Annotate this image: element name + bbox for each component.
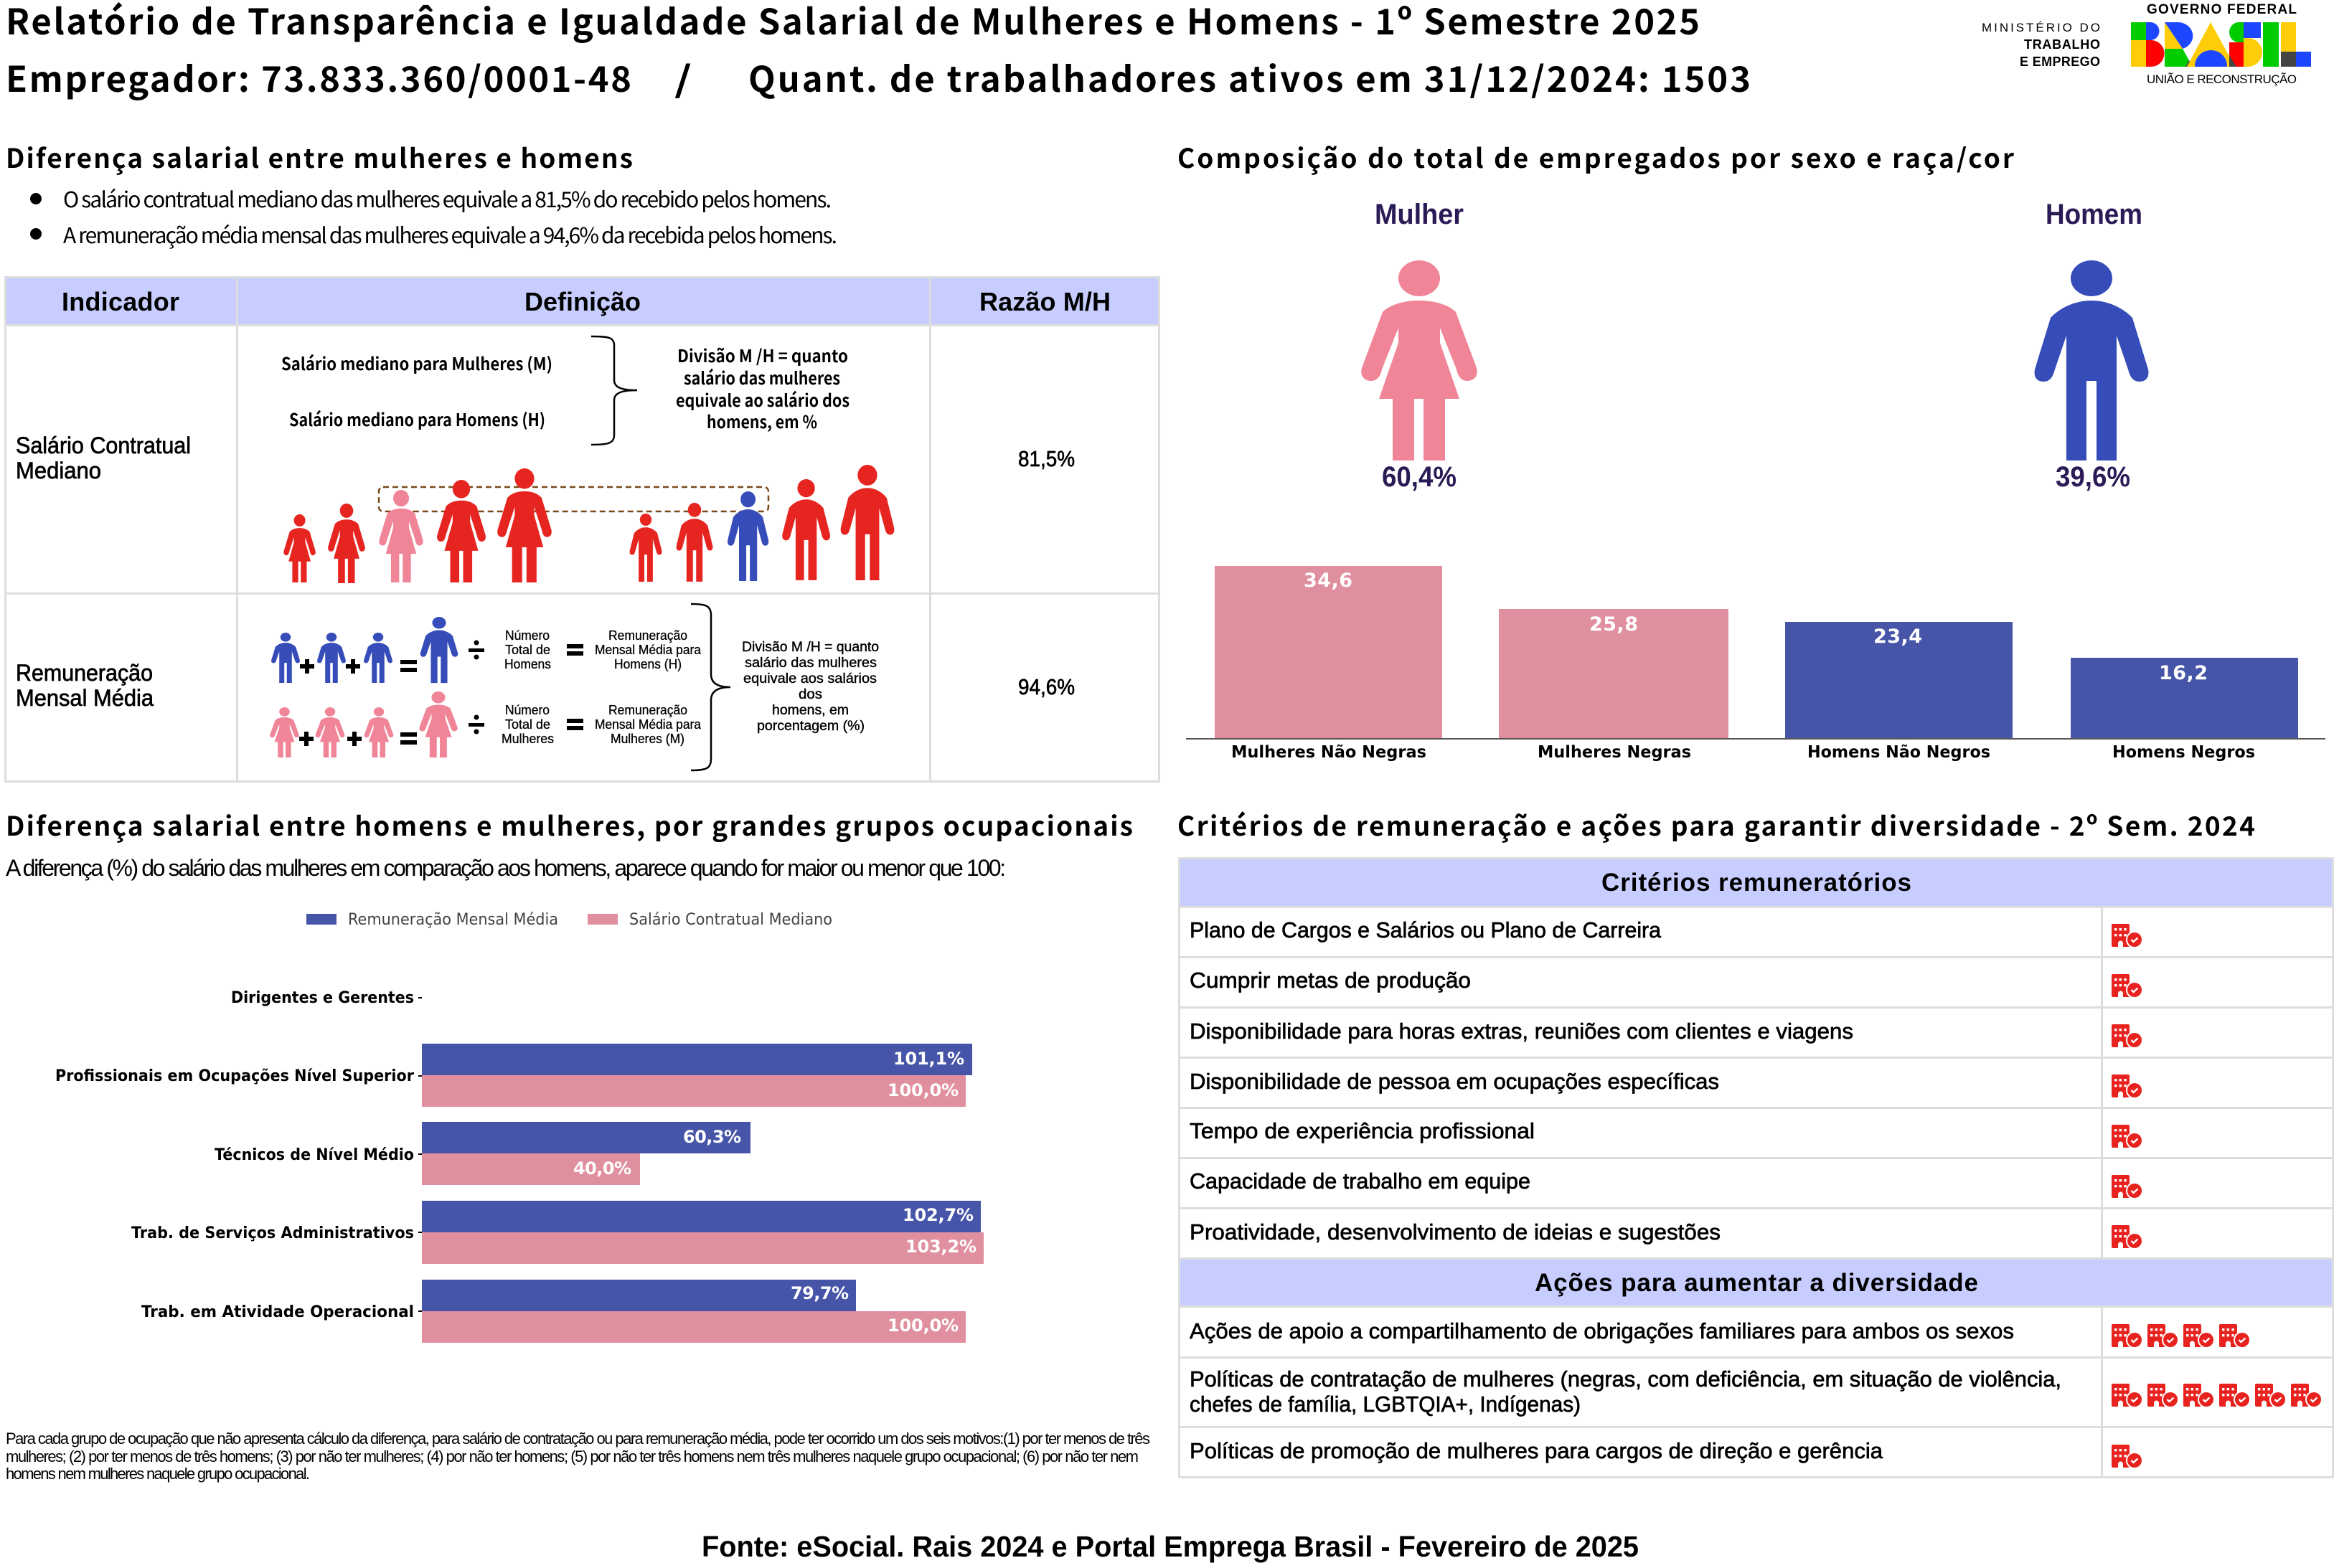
- bar chart: composição: Homens Não Negros: [1807, 743, 1990, 762]
- title: Empregador: 73.833.360/0001-48: [6, 52, 631, 103]
- title: [6, 0, 1751, 103]
- footnote: mulheres; (2) por ter menos de três homens; (3) por não ter mulheres; (4) por não ter homens; (5) por não ter três homens nem três mulheres naquele grupo ocupacional; (6) por não ter nem: [6, 1447, 1139, 1465]
- division explanation 2: equivale aos salários: [743, 671, 877, 686]
- bar chart: grupos ocupacionais: Profissionais em Ocupações Nível Superior: [55, 1067, 414, 1085]
- value: 94,6%: 94,6%: [1018, 674, 1075, 699]
- heading: grupos ocupacionais: Diferença salarial entre homens e mulheres, por grandes grupos ocupacionais: [6, 805, 1133, 844]
- heading: diferença salarial: Diferença salarial entre mulheres e homens: [6, 137, 633, 176]
- bar chart: grupos ocupacionais: Dirigentes e Gerentes: [231, 989, 414, 1007]
- bar chart: grupos ocupacionais: 101,1%: [893, 1049, 964, 1069]
- text: número total de mulheres: Número: [505, 703, 550, 717]
- text: número total de mulheres: [502, 703, 554, 746]
- bar chart: composição: 16,2: [2159, 662, 2208, 684]
- legend: Salário Contratual Mediano: [629, 911, 832, 929]
- icon: woman: [1361, 260, 1477, 461]
- header: critérios remuneratórios: Critérios remuneratórios: [1601, 869, 1911, 897]
- bullet list: O salário contratual mediano das mulheres equivale a 81,5% do recebido pelos homens.: [63, 182, 832, 214]
- criteria rows: [1190, 917, 1853, 1245]
- text: número total de homens: Número: [505, 628, 550, 643]
- bullet list: A remuneração média mensal das mulheres equivale a 94,6% da recebida pelos homens.: [63, 218, 837, 250]
- actions rows: [1190, 1318, 2061, 1463]
- text: remuneração mulheres: Remuneração: [608, 703, 687, 717]
- table header: Razão M/H: [979, 287, 1111, 316]
- panel: tabela de indicadores: [4, 276, 1160, 783]
- text: remuneração homens: Remuneração: [608, 628, 687, 643]
- bullet list: [30, 182, 837, 250]
- criteria icons: [2112, 924, 2143, 1250]
- icon: man: [2035, 260, 2148, 461]
- division explanation: [676, 342, 850, 433]
- text: remuneração homens: Homens (H): [614, 657, 682, 671]
- criteria rows: Tempo de experiência profissional: [1190, 1118, 1535, 1143]
- footnote: [6, 1430, 1150, 1483]
- division explanation: homens, em %: [707, 408, 817, 433]
- row label: remuneração mensal média: Remuneração: [16, 660, 153, 686]
- heading: critérios: Critérios de remuneração e ações para garantir diversidade - 2º Sem. 2024: [1177, 805, 2255, 844]
- table header: [62, 287, 1111, 316]
- label: Mulher: Mulher: [1375, 199, 1464, 230]
- text: número total de homens: Homens: [504, 657, 551, 671]
- definition: salário mediano text: Salário mediano para Mulheres (M): [281, 350, 552, 375]
- median dashed box: [379, 487, 768, 511]
- bar chart: composição: Mulheres Negras: [1538, 743, 1691, 762]
- subtitle: A diferença (%) do salário das mulheres em comparação aos homens, aparece quando for maior ou menor que 100:: [6, 855, 1006, 881]
- text: número total de mulheres: Total de: [505, 717, 550, 732]
- text: remuneração homens: Mensal Média para: [595, 643, 702, 657]
- text: remuneração homens: [595, 628, 702, 671]
- actions rows: Políticas de promoção de mulheres para cargos de direção e gerência: [1190, 1438, 1883, 1463]
- bar chart: composição: [1186, 566, 2325, 762]
- heading: composição: Composição do total de empregados por sexo e raça/cor: [1177, 137, 2015, 176]
- bar chart: grupos ocupacionais: 40,0%: [573, 1158, 631, 1179]
- figures: men average formula: [271, 617, 583, 683]
- text: número total de homens: [504, 628, 551, 671]
- bar chart: grupos ocupacionais: [55, 989, 984, 1343]
- panel: critérios table: [1178, 857, 2334, 1478]
- bar chart: grupos ocupacionais: 100,0%: [888, 1080, 959, 1100]
- bar chart: grupos ocupacionais: 100,0%: [888, 1316, 959, 1336]
- actions rows: chefes de família, LGBTQIA+, Indígenas): [1190, 1392, 1581, 1417]
- bar chart: grupos ocupacionais: Trab. em Atividade Operacional: [141, 1303, 414, 1321]
- figures: men median: [630, 465, 894, 582]
- bar chart: grupos ocupacionais: 103,2%: [905, 1237, 977, 1257]
- row label: salário contratual mediano: Salário Contratual: [16, 433, 191, 458]
- text: remuneração mulheres: [595, 703, 702, 746]
- criteria rows: Plano de Cargos e Salários ou Plano de Carreira: [1190, 917, 1662, 943]
- logo: governo federal: UNIÃO E RECONSTRUÇÃO: [2147, 72, 2297, 86]
- division explanation 2: homens, em: [772, 703, 849, 718]
- criteria rows: Cumprir metas de produção: [1190, 968, 1471, 993]
- criteria rows: Capacidade de trabalho em equipe: [1190, 1168, 1530, 1194]
- division explanation 2: porcentagem (%): [757, 719, 865, 734]
- figures: women median: [283, 468, 552, 583]
- bar chart: composição: Homens Negros: [2112, 743, 2255, 762]
- footnote: homens nem mulheres naquele grupo ocupacional.: [6, 1465, 310, 1483]
- text: remuneração mulheres: Mulheres (M): [611, 732, 684, 746]
- division explanation: Divisão M /H = quanto: [677, 342, 848, 367]
- text: número total de mulheres: Mulheres: [502, 732, 554, 746]
- figures: women average formula: [270, 691, 583, 757]
- bar chart: composição: 25,8: [1589, 613, 1638, 636]
- division explanation 2: Divisão M /H = quanto: [742, 640, 879, 655]
- bar chart: grupos ocupacionais: 60,3%: [683, 1127, 741, 1147]
- bar chart: composição: 34,6: [1304, 570, 1352, 592]
- row label: salário contratual mediano: [16, 433, 191, 483]
- source: Fonte: eSocial. Rais 2024 e Portal Emprega Brasil - Fevereiro de 2025: [702, 1530, 1639, 1563]
- text: número total de homens: Total de: [505, 643, 550, 657]
- actions rows: Ações de apoio a compartilhamento de obrigações familiares para ambos os sexos: [1190, 1318, 2014, 1343]
- bar chart: composição: 23,4: [1873, 625, 1922, 648]
- bar chart: grupos ocupacionais: Trab. de Serviços Administrativos: [131, 1224, 414, 1242]
- legend: [306, 911, 832, 929]
- text: remuneração mulheres: Mensal Média para: [595, 717, 702, 732]
- logo: governo federal: [2131, 2, 2311, 86]
- division explanation: salário das mulheres: [684, 364, 840, 389]
- bar chart: grupos ocupacionais: Técnicos de Nível Médio: [215, 1146, 414, 1164]
- bar chart: composição: Mulheres Não Negras: [1231, 743, 1426, 762]
- logo: governo federal: GOVERNO FEDERAL: [2147, 2, 2297, 17]
- definition: salário mediano text: [281, 350, 552, 431]
- logo: ministry: [1982, 21, 2100, 69]
- row label: salário contratual mediano: Mediano: [16, 458, 101, 483]
- label: Homem: Homem: [2046, 199, 2142, 230]
- legend: Remuneração Mensal Média: [348, 911, 558, 929]
- logo: ministry: E EMPREGO: [2020, 55, 2100, 69]
- criteria rows: Proatividade, desenvolvimento de ideias e sugestões: [1190, 1219, 1721, 1245]
- footnote: Para cada grupo de ocupação que não apresenta cálculo da diferença, para salário de contratação ou para remuneração média, pode ter ocorrido um dos seis motivos:(1) por ter menos de três: [6, 1430, 1150, 1447]
- criteria rows: Disponibilidade para horas extras, reuniões com clientes e viagens: [1190, 1019, 1853, 1044]
- value: 39,6%: 39,6%: [2056, 461, 2130, 493]
- row label: remuneração mensal média: [16, 660, 154, 711]
- table header: Indicador: [62, 287, 179, 316]
- bar chart: grupos ocupacionais: 79,7%: [791, 1283, 849, 1303]
- value: 81,5%: 81,5%: [1018, 446, 1075, 471]
- brace 2: [691, 604, 730, 770]
- value: 60,4%: 60,4%: [1382, 461, 1457, 493]
- bar chart: grupos ocupacionais: 102,7%: [903, 1205, 974, 1225]
- brace: [591, 336, 637, 445]
- division explanation 2: [742, 640, 879, 734]
- definition: salário mediano text: Salário mediano para Homens (H): [289, 406, 545, 431]
- actions icons: [2112, 1324, 2323, 1469]
- division explanation: equivale ao salário dos: [676, 387, 850, 412]
- table header: Definição: [524, 287, 641, 316]
- row label: remuneração mensal média: Mensal Média: [16, 685, 154, 711]
- title: Quant. de trabalhadores ativos em 31/12/2024: 1503: [748, 52, 1751, 103]
- actions rows: Políticas de contratação de mulheres (negras, com deficiência, em situação de violência,: [1190, 1366, 2061, 1392]
- logo: ministry: TRABALHO: [2024, 37, 2100, 52]
- logo: ministry: MINISTÉRIO DO: [1982, 21, 2100, 34]
- division explanation 2: salário das mulheres: [745, 656, 877, 671]
- division explanation 2: dos: [799, 687, 822, 702]
- title: /: [674, 52, 692, 103]
- criteria rows: Disponibilidade de pessoa em ocupações específicas: [1190, 1069, 1719, 1094]
- header: ações diversidade: Ações para aumentar a diversidade: [1535, 1269, 1978, 1297]
